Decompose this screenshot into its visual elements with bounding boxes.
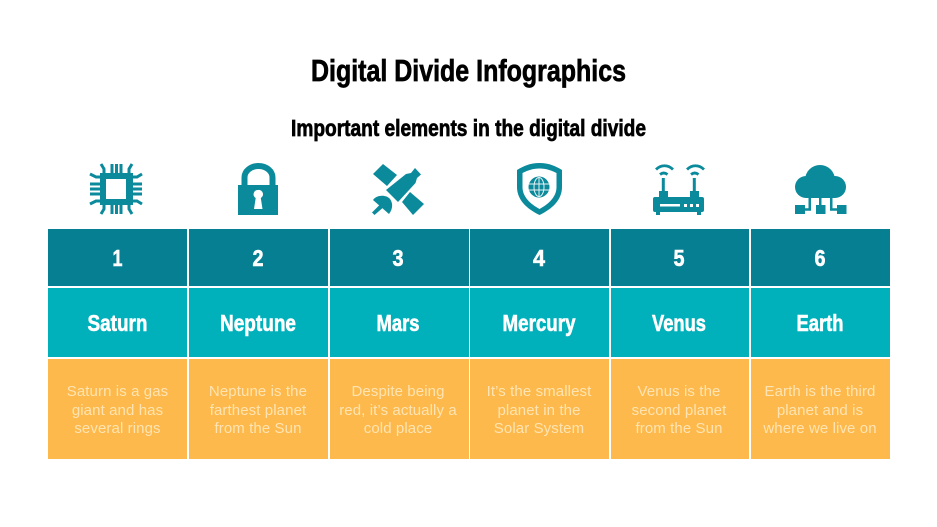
title: Digital Divide Infographics bbox=[311, 53, 626, 88]
column 5: Venus: Venus is the bbox=[638, 383, 720, 400]
column 3: Mars bbox=[330, 229, 469, 459]
icon: satellite bbox=[372, 164, 424, 215]
column 2: Neptune: farthest planet bbox=[210, 402, 307, 419]
icon: shield with globe bbox=[517, 163, 562, 215]
column 4: Mercury: planet in the bbox=[497, 402, 581, 419]
icon: padlock bbox=[238, 166, 278, 215]
column 3: Mars: 3 bbox=[392, 245, 404, 271]
column 6: Earth: where we live on bbox=[762, 420, 877, 437]
column 4: Mercury: It’s the smallest bbox=[487, 383, 592, 400]
column 6: Earth: Earth is the third bbox=[764, 383, 876, 400]
column 1: Saturn: giant and has bbox=[72, 402, 163, 419]
column 3: Mars: Despite being bbox=[351, 383, 445, 400]
column 4: Mercury: 4 bbox=[533, 245, 545, 271]
column 4: Mercury: Mercury bbox=[502, 310, 576, 336]
table: six planet columns bbox=[48, 229, 890, 459]
column 5: Venus: from the Sun bbox=[635, 420, 723, 437]
column 1: Saturn bbox=[48, 229, 187, 459]
column 1: Saturn: Saturn bbox=[88, 310, 148, 336]
column 5: Venus: 5 bbox=[674, 245, 685, 271]
column 1: Saturn: 1 bbox=[112, 245, 123, 271]
icon: microchip bbox=[90, 164, 142, 214]
column 6: Earth: 6 bbox=[814, 245, 826, 271]
column 4: Mercury bbox=[470, 229, 609, 459]
column 2: Neptune bbox=[189, 229, 328, 459]
column 6: Earth: Earth bbox=[796, 310, 844, 336]
subtitle: Important elements in the digital divide bbox=[291, 115, 646, 141]
column 3: Mars: Mars bbox=[376, 310, 420, 336]
column 1: Saturn: Saturn is a gas bbox=[67, 383, 168, 400]
icon: cloud network bbox=[795, 165, 846, 214]
column 4: Mercury: Solar System bbox=[494, 420, 584, 437]
column 6: Earth: planet and is bbox=[777, 402, 863, 419]
column 3: Mars: cold place bbox=[364, 420, 432, 437]
column 5: Venus bbox=[611, 229, 749, 459]
column 2: Neptune: 2 bbox=[252, 245, 264, 271]
column 5: Venus: Venus bbox=[652, 310, 706, 336]
column 3: Mars: red, it’s actually a bbox=[339, 402, 457, 419]
column 6: Earth bbox=[751, 229, 890, 459]
column 2: Neptune: from the Sun bbox=[214, 420, 302, 437]
column 2: Neptune: Neptune bbox=[220, 310, 296, 336]
column 2: Neptune: Neptune is the bbox=[209, 383, 307, 400]
column 5: Venus: second planet bbox=[632, 402, 727, 419]
icon: wifi router bbox=[653, 166, 704, 215]
column 1: Saturn: several rings bbox=[74, 420, 161, 437]
